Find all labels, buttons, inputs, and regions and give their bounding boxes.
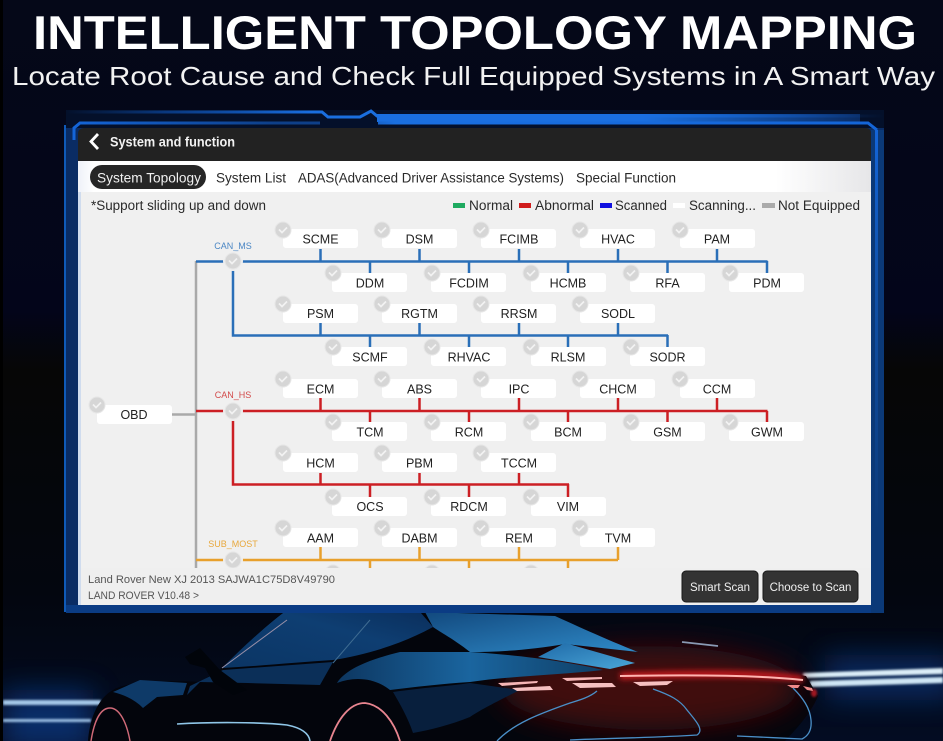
row 4 modules: RHVAC xyxy=(448,350,490,364)
screen left edge tint xyxy=(78,192,81,605)
tab: System List: System List xyxy=(216,170,286,186)
car lower rear panel xyxy=(393,683,520,733)
button: Choose to Scan xyxy=(763,571,858,602)
frame top bright band xyxy=(377,114,860,122)
row 1 modules: AAM xyxy=(307,532,334,546)
software version: LAND ROVER V10.48 > xyxy=(88,590,199,602)
SUB_MOST network xyxy=(196,520,655,568)
car mirror xyxy=(185,648,247,695)
car door sill line xyxy=(177,723,310,741)
row 2 modules: RCM xyxy=(455,426,483,440)
row 2 modules: TCM xyxy=(356,426,384,440)
row 3 modules: RRSM xyxy=(501,307,537,321)
screen header bar xyxy=(78,128,871,161)
frame right inner line xyxy=(875,130,878,530)
clipped row 2 icons xyxy=(326,564,538,568)
row 3 modules: TCCM xyxy=(501,456,537,470)
row 3 modules: PSM xyxy=(307,307,334,321)
row 3 modules xyxy=(275,296,655,323)
car rear haunch highlight xyxy=(337,652,603,690)
left edge strip xyxy=(0,0,3,741)
CAN_HS network xyxy=(196,371,804,516)
bus node xyxy=(223,401,243,421)
tail light bar xyxy=(498,674,817,697)
active tab: System Topology: System Topology xyxy=(97,170,201,186)
row 1 modules: DSM xyxy=(406,232,433,246)
car rear red glow xyxy=(500,646,800,730)
row 2 modules: BCM xyxy=(554,426,582,440)
button: Smart Scan: Smart Scan xyxy=(690,582,750,594)
row 2 modules: PDM xyxy=(753,276,781,290)
car B-pillar line xyxy=(333,620,370,663)
header title: System and function xyxy=(110,134,235,150)
gray trunk lines xyxy=(172,261,196,568)
active tab: System Topology xyxy=(90,165,206,189)
bus node xyxy=(223,552,243,568)
row 1 modules: ABS xyxy=(407,382,432,396)
diagram area background xyxy=(78,192,871,568)
row 4 modules: OCS xyxy=(356,500,384,514)
vehicle info: Land Rover New XJ 2013 SAJWA1C75D8V49790 xyxy=(88,574,335,586)
row 1 modules: HVAC xyxy=(601,232,635,246)
row 3 modules: HCM xyxy=(306,456,335,470)
row 4 modules: VIM xyxy=(557,500,579,514)
car front fender highlight xyxy=(113,680,187,708)
row 3 modules: RGTM xyxy=(401,307,438,321)
row 1 modules: PAM xyxy=(704,232,730,246)
row 1 modules: FCIMB xyxy=(500,232,538,246)
title: INTELLIGENT TOPOLOGY MAPPING xyxy=(33,6,917,59)
row 1 modules xyxy=(275,222,755,248)
OBD node: OBD xyxy=(120,408,148,422)
status legend: Normal xyxy=(469,198,513,213)
label: CAN_HS: CAN_HS xyxy=(215,390,251,400)
row 1 modules xyxy=(275,371,755,398)
car spoiler panel xyxy=(538,643,635,669)
row 2 modules: FCDIM xyxy=(449,276,489,290)
status legend: Not Equipped xyxy=(778,198,860,213)
bus node xyxy=(223,251,243,271)
row 3 modules: SODL xyxy=(601,307,635,321)
row 2 modules xyxy=(325,265,804,292)
row 2 modules xyxy=(325,414,804,441)
status legend: Abnormal xyxy=(535,198,594,213)
button: Choose to Scan: Choose to Scan xyxy=(770,582,851,594)
row 4 modules: RLSM xyxy=(551,350,585,364)
car body light lines xyxy=(497,642,811,741)
row 1 modules: CCM xyxy=(703,382,731,396)
row 4 modules: SODR xyxy=(649,350,686,364)
car hood highlight xyxy=(187,662,333,695)
row 1 modules: TVM xyxy=(605,532,631,546)
row 4 modules: RDCM xyxy=(450,500,488,514)
row 2 modules: DDM xyxy=(356,276,384,290)
row 1 modules: IPC xyxy=(509,382,529,396)
footer bar xyxy=(81,568,871,605)
row 1 modules: REM xyxy=(505,532,533,546)
car body silhouette xyxy=(88,606,818,741)
status legend xyxy=(453,198,860,213)
row 3 modules xyxy=(275,445,556,472)
OBD node xyxy=(89,397,172,424)
rear wheel arc xyxy=(330,703,400,741)
row 2 modules: GWM xyxy=(751,426,783,440)
app screen xyxy=(78,128,871,605)
CAN_MS network xyxy=(196,222,804,366)
car side window xyxy=(222,608,433,668)
row 3 modules: PBM xyxy=(406,456,433,470)
button: Smart Scan xyxy=(682,571,758,602)
icon: back chevron xyxy=(91,134,98,149)
device frame xyxy=(64,110,884,613)
front wheel arc xyxy=(91,708,130,741)
car windshield line xyxy=(222,620,287,668)
topology diagram xyxy=(89,222,804,581)
sliding hint: *Support sliding up and down xyxy=(91,198,266,213)
frame top outer line xyxy=(66,111,884,117)
label: SUB_MOST: SUB_MOST xyxy=(208,539,258,549)
row 2 modules: GSM xyxy=(653,426,682,440)
label: CAN_MS: CAN_MS xyxy=(214,241,252,251)
subtitle: Locate Root Cause and Check Full Equipped Systems in A Smart Way xyxy=(12,61,935,91)
row 1 modules: CHCM xyxy=(599,382,637,396)
row 1 modules: DABM xyxy=(401,532,438,546)
status legend: Scanned xyxy=(615,198,667,213)
row 1 modules xyxy=(275,520,655,547)
tab bar xyxy=(78,161,871,192)
row 2 modules: RFA xyxy=(655,276,680,290)
row 2 modules: HCMB xyxy=(550,276,586,290)
car rear deck highlight xyxy=(425,612,638,652)
frame top inner line xyxy=(74,123,877,140)
background light streaks xyxy=(3,655,943,741)
row 1 modules: ECM xyxy=(307,382,334,396)
car xyxy=(88,606,818,741)
row 4 modules xyxy=(325,339,705,366)
status legend: Scanning... xyxy=(689,198,756,213)
row 4 modules: SCMF xyxy=(352,350,388,364)
row 1 modules: SCME xyxy=(302,232,339,246)
tab: ADAS: ADAS(Advanced Driver Assistance Systems) xyxy=(298,170,564,186)
tab: Special Function: Special Function xyxy=(576,170,676,186)
row 4 modules xyxy=(325,489,606,516)
